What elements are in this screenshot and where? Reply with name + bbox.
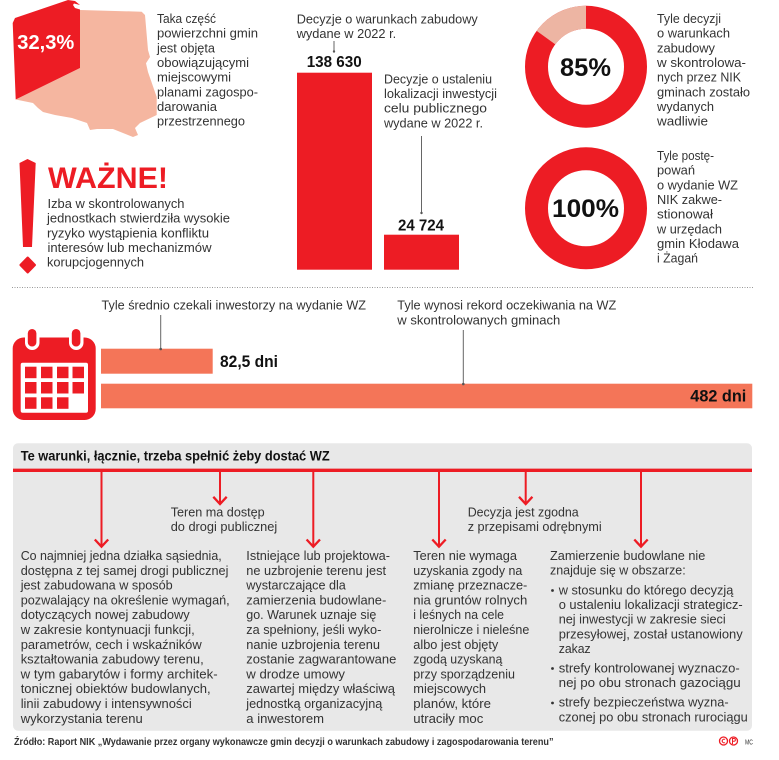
- column: utilities: zamierzenia budowlane-: [246, 592, 386, 607]
- donut description: Tyle decyzji: [657, 11, 721, 26]
- source note: Źródło: Raport NIK „Wydawanie przez organy wykonawcze gmin decyzji o warunkach zabudowy i zagospodarowania terenu”: [14, 735, 554, 748]
- value: 482 days: 482 dni: [690, 388, 746, 406]
- map description: darowania: [157, 99, 218, 114]
- column: land use: i leśnych na cele: [413, 607, 504, 622]
- subheading: road access: [171, 505, 277, 534]
- subheading: road access: Teren ma dostęp: [171, 505, 265, 520]
- bar: 482 days: [101, 384, 752, 408]
- value: 24 724: 24 724: [398, 218, 444, 235]
- column: land use: albo jest objęty: [413, 637, 499, 652]
- column: land use: przy sporządzeniu: [413, 666, 515, 681]
- map of Poland: [13, 0, 157, 137]
- map description: miejscowymi: [157, 70, 231, 85]
- column: neighbouring plot: dotyczących nowej zabudowy: [21, 607, 190, 622]
- bar: 24 724: [384, 235, 459, 270]
- panel: important warning: [20, 159, 230, 272]
- column: excluded areas: strefy bezpieczeństwa wyzna-: [559, 695, 729, 710]
- column: utilities: go. Warunek uznaje się: [246, 607, 376, 622]
- column: excluded areas: przesyłowej, został ustanowiony: [559, 626, 743, 641]
- label: public investment decisions: [383, 72, 497, 130]
- copyright marks: [720, 737, 753, 746]
- column: excluded areas: zakaz: [559, 641, 591, 656]
- column: excluded areas: Zamierzenie budowlane nie: [550, 548, 705, 563]
- column: utilities: zawartej między właściwą: [246, 681, 396, 696]
- column: neighbouring plot: parametrów, cech i wskaźników: [21, 637, 202, 652]
- donut description: nych przez NIK: [657, 70, 741, 85]
- column: land use: nierolnicze i nieleśne: [413, 622, 529, 637]
- column: land use: zmianę przeznacze-: [413, 578, 527, 593]
- column: land use: nia gruntów rolnych: [413, 592, 527, 607]
- icon: calendar: [13, 329, 96, 420]
- column: neighbouring plot: kształtowania zabudowy terenu,: [21, 652, 204, 667]
- map description: planami zagospo-: [157, 84, 258, 99]
- value: 82,5 days: 82,5 dni: [220, 353, 278, 371]
- column: utilities: za spełniony, jeśli wyko-: [246, 622, 381, 637]
- label: WZ decisions: [296, 12, 478, 41]
- column: excluded areas: o ustaleniu lokalizacji strategicz-: [559, 597, 743, 612]
- subheading: compliance: Decyzja jest zgodna: [468, 505, 579, 520]
- subheading: compliance: z przepisami odrębnymi: [468, 519, 602, 534]
- column: utilities: jednostką organizacyjną: [245, 696, 383, 711]
- map description: Taka część: [157, 11, 216, 26]
- column: utilities: a inwestorem: [246, 711, 324, 726]
- column: utilities: Istniejące lub projektowa-: [246, 548, 390, 563]
- label: public investment decisions: Decyzje o ustaleniu: [384, 72, 492, 86]
- column: land use: Teren nie wymaga: [413, 548, 518, 563]
- donut description: NIK zakwe-: [657, 192, 722, 207]
- column: land use: zgodą uzyskaną: [413, 652, 503, 667]
- map description: powierzchni gmin: [157, 26, 258, 41]
- column: land use: uzyskania zgody na: [413, 563, 523, 578]
- column: neighbouring plot: wykorzystania terenu: [20, 711, 143, 726]
- column: excluded areas: czonej po obu stronach rurociągu: [559, 709, 748, 724]
- donut value: 100%: [552, 195, 619, 223]
- column: neighbouring plot: jest zabudowana w sposób: [20, 578, 173, 593]
- panel: waiting time: [13, 297, 752, 420]
- warning text: ryzyko wystąpienia konfliktu: [47, 225, 209, 240]
- donut description: powań: [657, 163, 695, 178]
- subheading: compliance: [468, 505, 602, 534]
- leader line: [333, 41, 335, 53]
- column: land use: [413, 548, 529, 726]
- donut chart: 100%: [536, 148, 740, 266]
- donut description: stionował: [657, 207, 713, 222]
- column: utilities: nanie uzbrojenia terenu: [246, 637, 380, 652]
- column: neighbouring plot: Co najmniej jedna działka sąsiednia,: [21, 548, 222, 563]
- label: public investment decisions: lokalizacji inwestycji: [384, 86, 497, 101]
- column: excluded areas: nej po obu stronach gazociągu: [559, 675, 741, 690]
- warning text: jednostkach stwierdziła wysokie: [46, 211, 230, 226]
- donut description: zabudowy: [657, 40, 715, 55]
- value: 138 630: 138 630: [307, 54, 362, 71]
- label: WZ decisions: Decyzje o warunkach zabudowy: [297, 12, 478, 26]
- donut description: w urzędach: [656, 221, 722, 236]
- column: utilities: zostanie zagwarantowane: [246, 652, 396, 667]
- leader line: [159, 315, 162, 350]
- column: neighbouring plot: pozwalający na określenie wymagań,: [21, 592, 230, 607]
- label: WZ decisions: wydane w 2022 r.: [296, 26, 396, 41]
- icon: exclamation mark: [20, 159, 36, 272]
- column: excluded areas: strefy kontrolowanej wyznaczo-: [559, 660, 740, 675]
- column: excluded areas: znajduje się w obszarze:: [550, 563, 686, 578]
- column: utilities: ne uzbrojenie terenu jest: [246, 563, 386, 578]
- map description: przestrzennego: [157, 114, 245, 129]
- column: neighbouring plot: w zakresie kontynuacji funkcji,: [20, 622, 195, 637]
- arrows from heading rule: [13, 470, 752, 547]
- donut description: wydanych: [656, 99, 714, 114]
- warning heading: WAŻNE!: [48, 162, 168, 195]
- bar chart: decisions in 2022: [296, 12, 497, 270]
- map value: 32,3%: [17, 32, 75, 54]
- donut value: 85%: [560, 54, 611, 82]
- donut ring: [536, 159, 636, 258]
- leader line: [420, 136, 423, 214]
- column: land use: planów, które: [413, 696, 491, 711]
- column: neighbouring plot: linii zabudowy i intensywności: [21, 696, 192, 711]
- column: neighbouring plot: [20, 548, 230, 726]
- donut description: wadliwie: [656, 114, 708, 129]
- donut description: [656, 11, 750, 129]
- copyright marks: MC: [745, 740, 753, 746]
- column: excluded areas: [550, 548, 748, 724]
- column: excluded areas: w stosunku do którego decyzją: [558, 582, 734, 597]
- subheading: road access: do drogi publicznej: [171, 519, 277, 534]
- label: public investment decisions: wydane w 2022 r.: [383, 115, 483, 130]
- panel: Poland map share: [13, 0, 258, 137]
- column: excluded areas: nej inwestycji w zakresie sieci: [559, 612, 726, 627]
- panel background: [13, 443, 752, 731]
- column: neighbouring plot: w tym gabarytów i formy architek-: [20, 666, 218, 681]
- panel heading: Te warunki, łącznie, trzeba spełnić żeby dostać WZ: [21, 448, 330, 464]
- donut description: o warunkach: [657, 26, 730, 41]
- donut chart: 85%: [536, 6, 750, 129]
- label: record wait: Tyle wynosi rekord oczekiwania na WZ: [397, 297, 616, 312]
- donut description: w skontrolowa-: [656, 55, 746, 70]
- label: record wait: [396, 297, 616, 327]
- donut description: i Żagań: [657, 251, 698, 266]
- panel: conditions: [13, 443, 752, 731]
- bar: 82,5 days: [101, 349, 213, 374]
- map description: [156, 11, 258, 129]
- bar: 138 630: [297, 73, 372, 270]
- warning text: interesów lub mechanizmów: [48, 240, 212, 255]
- column: land use: utraciły moc: [413, 711, 484, 726]
- column: land use: miejscowych: [413, 681, 486, 696]
- donut description: o wydanie WZ: [657, 177, 738, 192]
- donut description: gminach zostało: [657, 84, 750, 99]
- column: utilities: w drodze umowy: [245, 666, 345, 681]
- map description: obowiązującymi: [157, 55, 249, 70]
- column: neighbouring plot: tonicznej obiektów budowlanych,: [21, 681, 211, 696]
- warning text: Izba w skontrolowanych: [48, 196, 184, 211]
- warning text: [46, 196, 230, 270]
- donut ring: [536, 6, 636, 116]
- leader line: [462, 330, 465, 385]
- label: public investment decisions: celu publicznego: [384, 101, 487, 116]
- column: neighbouring plot: dostępna z tej samej drogi publicznej: [21, 563, 228, 578]
- donut description: [656, 148, 740, 266]
- donut description: gmin Kłodawa: [657, 236, 740, 251]
- column: utilities: [245, 548, 396, 726]
- column: utilities: wystarczające dla: [245, 578, 346, 593]
- warning text: korupcjogennych: [47, 255, 144, 270]
- label: average wait: Tyle średnio czekali inwestorzy na wydanie WZ: [102, 297, 366, 312]
- donut description: Tyle postę-: [657, 148, 714, 163]
- label: record wait: w skontrolowanych gminach: [396, 312, 560, 327]
- map description: jest objęta: [156, 40, 216, 55]
